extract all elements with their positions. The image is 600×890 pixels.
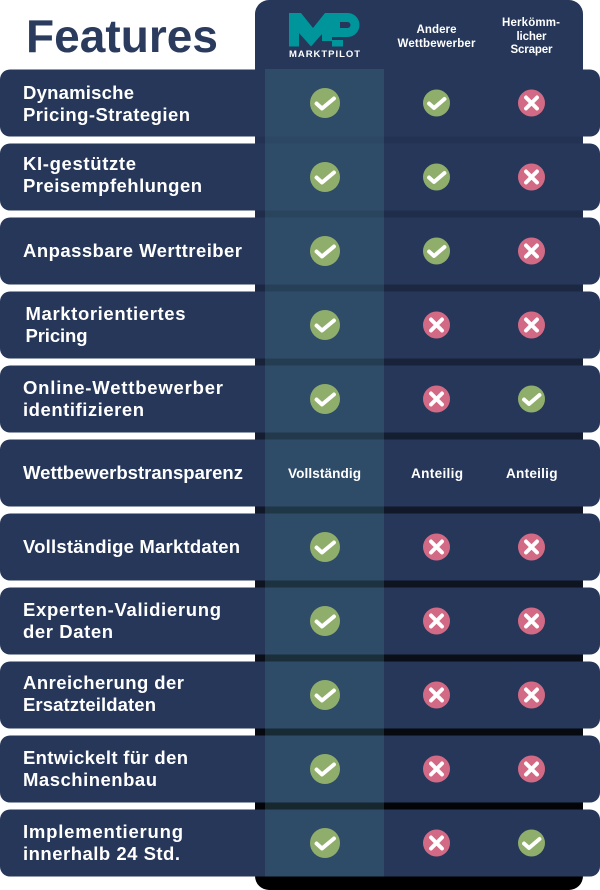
column: Andere Wettbewerber marks: Anteilig [411,466,463,481]
row: Vollständige Marktdaten [0,514,600,580]
row: Entwickelt für den Maschinenbau [0,736,600,802]
header: Marktpilot logo [289,13,360,60]
row: Anpassbare Werttreiber: Anpassbare Werttreiber [23,240,242,261]
column: Marktpilot marks [288,88,361,858]
panel: column backing [255,0,583,890]
header: Herkömmlicher Scraper: licher [516,31,547,43]
row: KI-gestützte Preisempfehlungen: KI-gestützte [23,153,136,174]
row: Online-Wettbewerber identifizieren [0,366,600,432]
row: Dynamische Pricing-Strategien: Pricing-Strategien [23,104,190,125]
row: Entwickelt für den Maschinenbau: Maschinenbau [23,769,157,790]
row: Marktorientiertes Pricing: Marktorientiertes [26,303,186,324]
row: Marktorientiertes Pricing [0,292,600,358]
column: Herkömmlicher Scraper marks: Anteilig [506,466,558,481]
column: Marktpilot marks: Vollständig [288,466,361,481]
row: Implementierung innerhalb 24 Std.: Implementierung [23,821,183,842]
row: Vollständige Marktdaten: Vollständige Marktdaten [23,536,240,557]
row: Anreicherung der Ersatzteildaten: Anreicherung der [23,672,184,693]
panel: Marktpilot column highlight [265,69,384,876]
row: Online-Wettbewerber identifizieren: Online-Wettbewerber [23,377,223,398]
row: Anreicherung der Ersatzteildaten [0,662,600,728]
row: Dynamische Pricing-Strategien: Dynamische [23,82,134,103]
header: Herkömmlicher Scraper [502,17,560,56]
header: Herkömmlicher Scraper: Scraper [510,44,553,56]
row: Experten-Validierung der Daten [0,588,600,654]
row: Anreicherung der Ersatzteildaten: Ersatzteildaten [23,694,156,715]
title: Features [26,10,218,62]
row: Dynamische Pricing-Strategien [0,70,600,136]
column: Herkömmlicher Scraper marks [506,90,558,856]
row: Experten-Validierung der Daten: der Daten [23,621,113,642]
row: KI-gestützte Preisempfehlungen [0,144,600,210]
row: Marktorientiertes Pricing: Pricing [26,325,88,346]
row: Implementierung innerhalb 24 Std. [0,810,600,876]
row: Experten-Validierung der Daten: Experten-Validierung [23,599,221,620]
header: Marktpilot logo: MARKTPILOT [289,49,360,60]
row: Wettbewerbstransparenz: Wettbewerbstransparenz [23,462,243,483]
row: Implementierung innerhalb 24 Std.: innerhalb 24 Std. [23,843,180,864]
row: Wettbewerbstransparenz [0,440,600,506]
header: Andere Wettbewerber: Andere [416,24,456,36]
header: Andere Wettbewerber [398,24,476,50]
column: Andere Wettbewerber marks [411,90,463,856]
header: Herkömmlicher Scraper: Herkömm- [502,17,560,29]
row: Anpassbare Werttreiber [0,218,600,284]
row: Entwickelt für den Maschinenbau: Entwickelt für den [23,747,188,768]
header: Andere Wettbewerber: Wettbewerber [398,38,476,50]
row: KI-gestützte Preisempfehlungen: Preisempfehlungen [23,175,202,196]
row: Online-Wettbewerber identifizieren: identifizieren [23,399,144,420]
